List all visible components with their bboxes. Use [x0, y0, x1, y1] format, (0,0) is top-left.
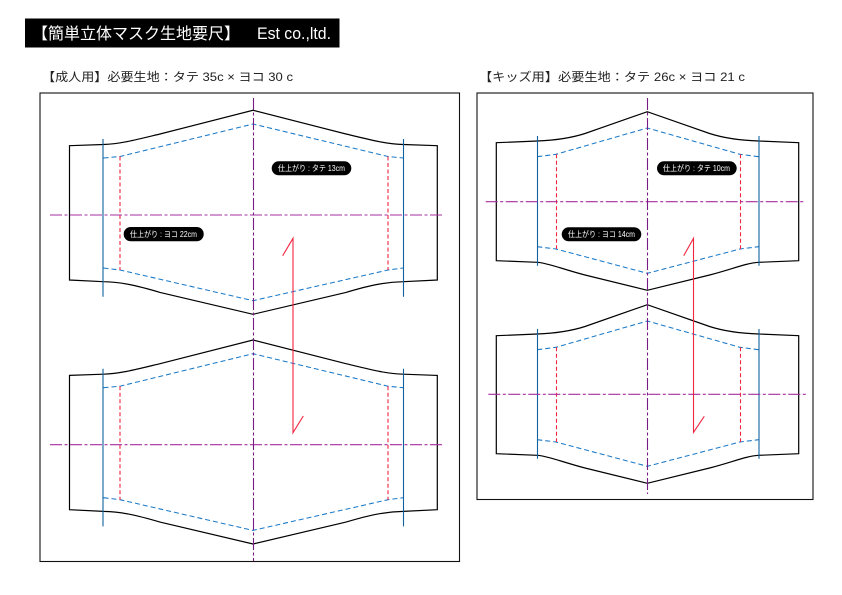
kids mask pattern: lower [488, 305, 807, 483]
kids mask pattern: upper [486, 112, 806, 290]
arrow: kids grain direction [684, 238, 704, 432]
title banner: 【簡単立体マスク生地要尺】 [32, 25, 240, 43]
callout: kids finished width: 仕上がり : ヨコ 14cm [568, 229, 635, 239]
adult centre fold line [252, 98, 254, 561]
panel: adult pattern [40, 93, 460, 562]
callout: adult finished width: 仕上がり : ヨコ 22cm [130, 229, 197, 239]
panel: kids pattern [477, 93, 813, 500]
kids centre fold line [646, 98, 648, 494]
callout: kids finished height: 仕上がり : タテ 10cm [663, 163, 730, 173]
callout: adult finished height: 仕上がり : タテ 13cm [278, 163, 345, 173]
heading: adult fabric size: 【成人用】必要生地：タテ 35c × ヨコ 30 c [42, 70, 293, 84]
adult mask pattern: upper [50, 110, 444, 314]
arrow: adult grain direction [283, 238, 303, 433]
heading: kids fabric size: 【キッズ用】必要生地：タテ 26c × ヨコ 21 c [479, 69, 745, 84]
adult mask pattern: lower [50, 340, 444, 544]
title banner: Est co.,ltd. [257, 24, 331, 43]
title banner [25, 18, 340, 48]
callout: adult finished width [124, 227, 204, 241]
callout: kids finished width [562, 227, 641, 241]
callout: adult finished height [272, 161, 351, 175]
callout: kids finished height [657, 161, 737, 175]
